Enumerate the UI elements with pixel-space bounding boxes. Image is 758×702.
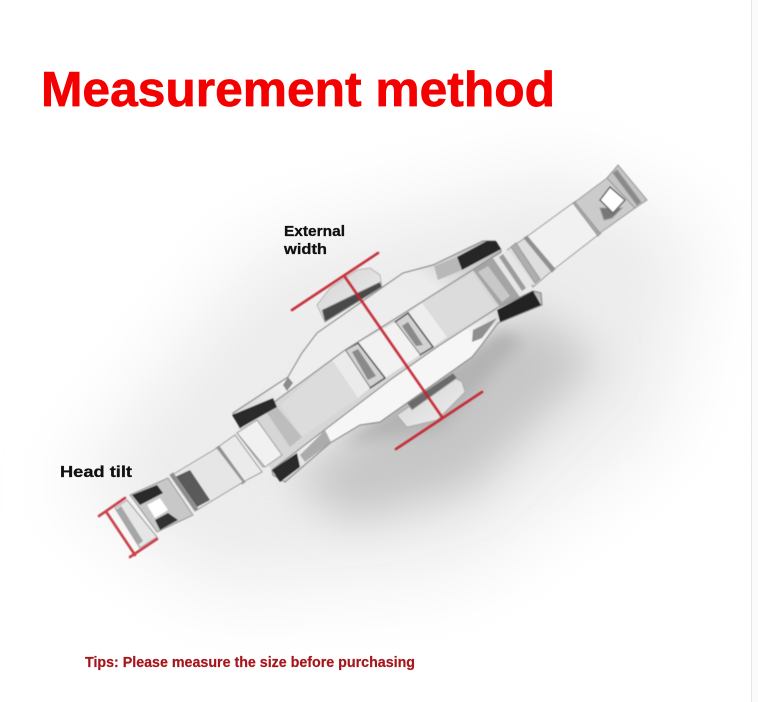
upper button lobe xyxy=(317,268,382,322)
centre plate with hinges xyxy=(237,250,533,470)
measurement line: external width xyxy=(292,253,482,449)
lower arm xyxy=(272,291,542,482)
tips: Tips: Please measure the size before purchasing xyxy=(85,655,415,671)
measurement line: head tilt xyxy=(99,498,157,557)
label: external width: External xyxy=(284,223,345,240)
title: Measurement method xyxy=(41,63,555,117)
left strap xyxy=(115,420,282,548)
lower button lobe xyxy=(397,373,465,427)
watch clasp illustration xyxy=(115,165,647,548)
right strap xyxy=(507,165,647,287)
label: head tilt: Head tilt xyxy=(60,464,133,481)
upper arm xyxy=(232,241,501,428)
label: external width: width xyxy=(283,241,327,258)
label: external width xyxy=(283,223,345,258)
